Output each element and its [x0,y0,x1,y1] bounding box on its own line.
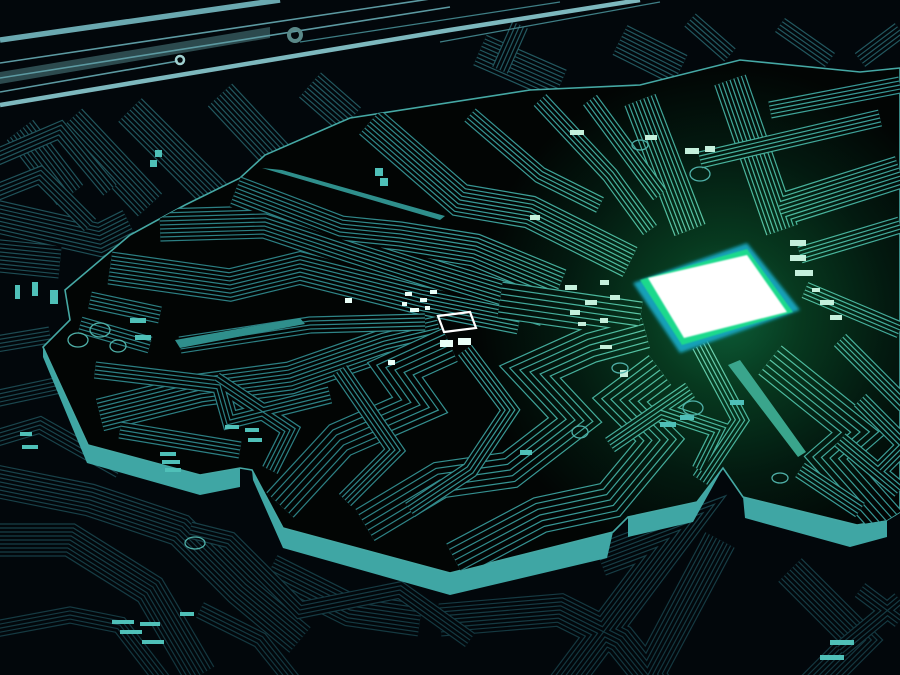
panel: centre right board side band [628,468,723,537]
chip: blue outer ring [633,243,800,353]
bright component cluster [345,290,476,365]
solid trace bands [175,168,806,457]
top left metallic rails [0,0,660,105]
connector pads [15,150,854,660]
board traces [80,80,900,560]
panel: right board side band [743,497,887,547]
bright pads near chip [530,130,842,377]
chip: white glowing die [648,255,787,338]
chip: green rim [640,249,793,345]
panel: board top surface [43,60,900,573]
panel: left board lobe side band [43,347,240,495]
icon: central white component [438,312,476,332]
panel: centre board lobe side band [252,470,613,595]
circular vias [68,140,788,549]
